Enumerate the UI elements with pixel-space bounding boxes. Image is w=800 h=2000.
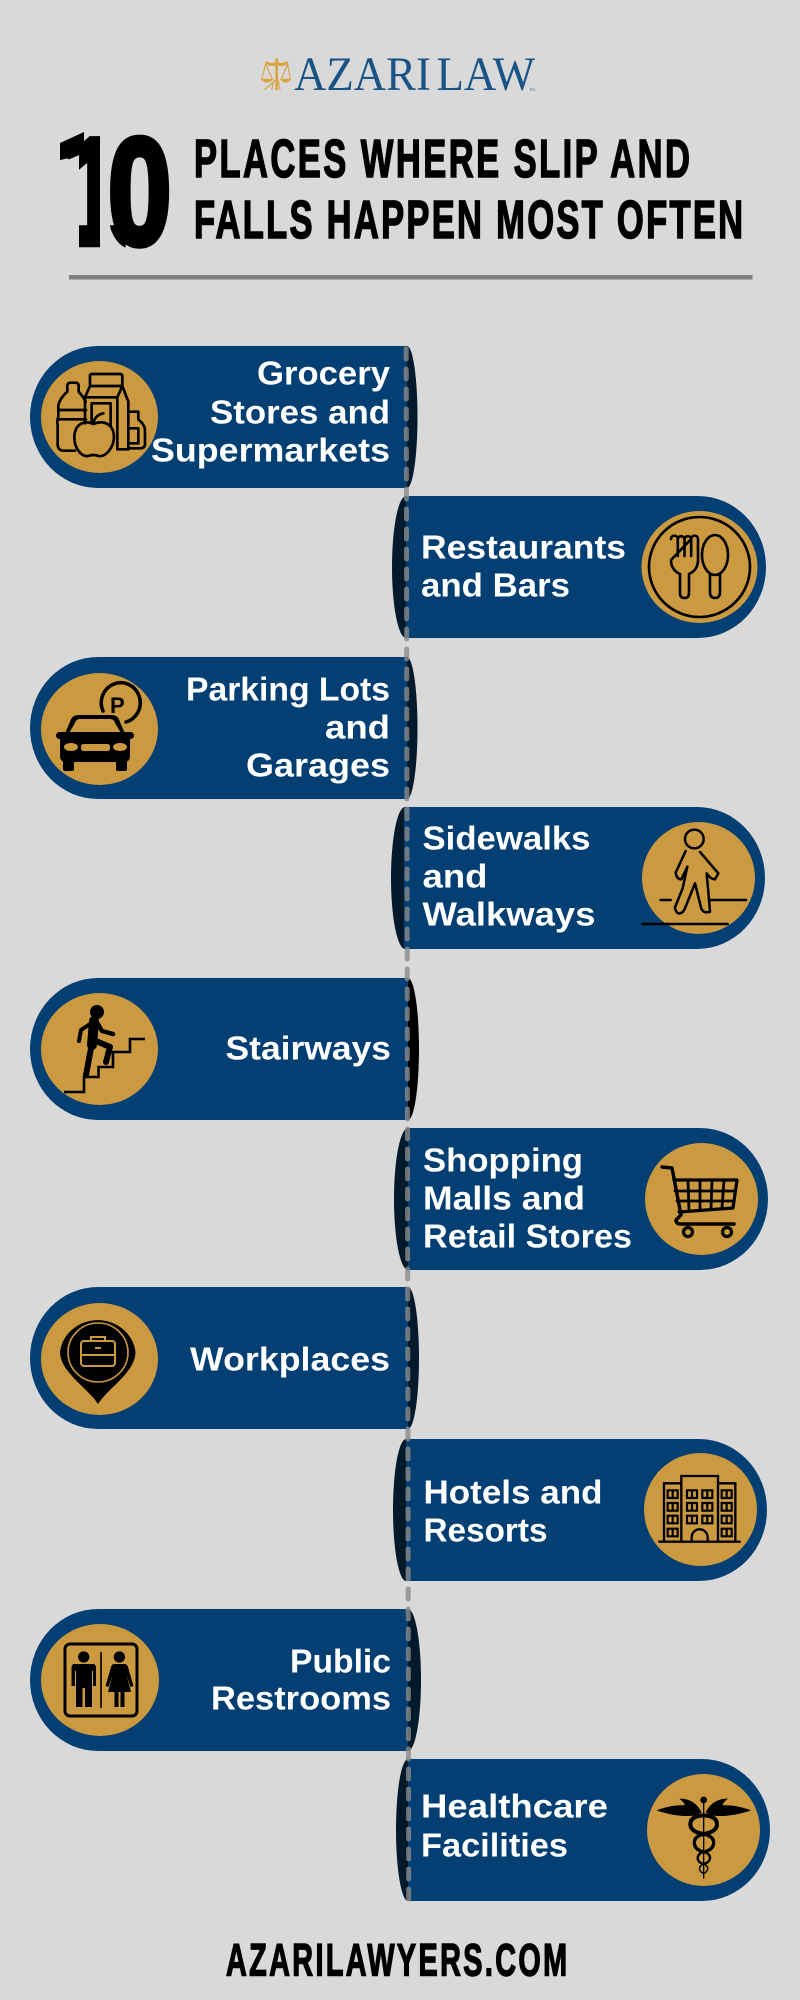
- label: Grocery: [257, 355, 391, 392]
- icon badge: [41, 673, 158, 785]
- fold cap: [391, 807, 419, 949]
- pill body: [406, 496, 766, 638]
- icon: location pin with briefcase: [60, 1320, 136, 1404]
- label: Public: [290, 1643, 391, 1680]
- icon: parked car with P sign: P: [110, 693, 125, 718]
- icon badge: [642, 822, 755, 934]
- icon: restroom sign: [65, 1644, 137, 1716]
- fold cap: [397, 978, 419, 1120]
- icon badge: [645, 1143, 758, 1255]
- panel: workplaces: [30, 1287, 419, 1429]
- title: [60, 132, 742, 249]
- icon badge: [41, 993, 158, 1105]
- icon badge: [644, 1453, 757, 1566]
- pill body: [406, 1439, 767, 1581]
- label: Facilities: [421, 1827, 568, 1864]
- panel: healthcare facilities: [396, 1759, 770, 1901]
- label: [421, 529, 626, 604]
- panel: shopping malls and retail stores: [394, 1128, 768, 1270]
- fold cap: [396, 346, 418, 488]
- title numeral 10: 10: [63, 107, 171, 277]
- icon: gold scales of justice: [262, 58, 290, 90]
- label: Walkways: [422, 896, 596, 933]
- label: Resorts: [424, 1512, 548, 1549]
- label: [186, 671, 390, 784]
- icon badge: [41, 361, 158, 473]
- icon: parked car with P sign: [56, 683, 140, 771]
- label: and: [325, 709, 390, 746]
- panel: public restrooms: [30, 1609, 421, 1751]
- fold cap: [396, 657, 418, 799]
- panel: sidewalks and walkways: [391, 807, 765, 949]
- panel: hotels and resorts: [393, 1439, 767, 1581]
- panel: grocery stores and supermarkets: [30, 346, 418, 488]
- label: Retail Stores: [423, 1218, 632, 1255]
- label: and: [422, 858, 488, 895]
- label: [423, 1142, 632, 1255]
- pill body: [404, 807, 765, 949]
- panel: parking lots and garages: [30, 657, 418, 799]
- label: Supermarkets: [151, 432, 390, 469]
- label: and Bars: [421, 567, 570, 604]
- title line 1: PLACES WHERE SLIP AND: [194, 128, 690, 189]
- pill body: [30, 1287, 408, 1429]
- label: [211, 1643, 391, 1717]
- title numeral 10: [60, 132, 170, 249]
- fold cap: [397, 1287, 419, 1429]
- footer: website: AZARILAWYERS.COM: [226, 1936, 567, 1986]
- title line 2: FALLS HAPPEN MOST OFTEN: [194, 189, 743, 250]
- label: [421, 1788, 608, 1864]
- pill body: [30, 657, 407, 799]
- label: Stores and: [210, 394, 390, 431]
- logo wordmark: AZARI LAW: [294, 48, 536, 101]
- label: Garages: [246, 747, 390, 784]
- label: [424, 1474, 602, 1549]
- logo: Azari Law: [262, 48, 536, 101]
- icon badge: [41, 1303, 158, 1415]
- icon: shopping cart: [662, 1167, 737, 1236]
- icon badge: [642, 511, 758, 623]
- icon badge: [41, 1624, 159, 1736]
- logo suffix: P.C.: [530, 88, 536, 92]
- icon: pedestrian on walkway: [642, 830, 746, 924]
- label: Hotels and: [424, 1474, 602, 1511]
- fold cap: [395, 1609, 421, 1751]
- label: [422, 820, 596, 933]
- pill body: [30, 978, 408, 1120]
- fold cap: [394, 1128, 422, 1270]
- fold cap: [393, 1439, 419, 1581]
- pill body: [408, 1759, 770, 1901]
- panel: restaurants and bars: [392, 496, 766, 638]
- label: Workplaces: [190, 1341, 390, 1378]
- label: Stairways: [226, 1030, 391, 1067]
- label: Healthcare: [421, 1788, 608, 1825]
- icon: caduceus: [657, 1797, 751, 1879]
- label: Shopping: [423, 1142, 583, 1179]
- label: Malls and: [423, 1180, 585, 1217]
- label: Restrooms: [211, 1680, 391, 1717]
- panel: stairways: [30, 978, 419, 1120]
- label: Parking Lots: [186, 671, 390, 708]
- label: Sidewalks: [422, 820, 590, 857]
- label: Restaurants: [421, 529, 626, 566]
- icon: person climbing stairs: [64, 1005, 145, 1092]
- icon: hotel building: [658, 1476, 741, 1542]
- fold cap: [392, 496, 420, 638]
- icon: groceries: [57, 374, 145, 456]
- icon badge: [647, 1774, 760, 1886]
- icon: plate, fork and spoon: [649, 517, 750, 617]
- label: [151, 355, 391, 469]
- pill body: [30, 1609, 408, 1751]
- pill body: [408, 1128, 768, 1270]
- pill body: [30, 346, 407, 488]
- fold cap: [396, 1759, 420, 1901]
